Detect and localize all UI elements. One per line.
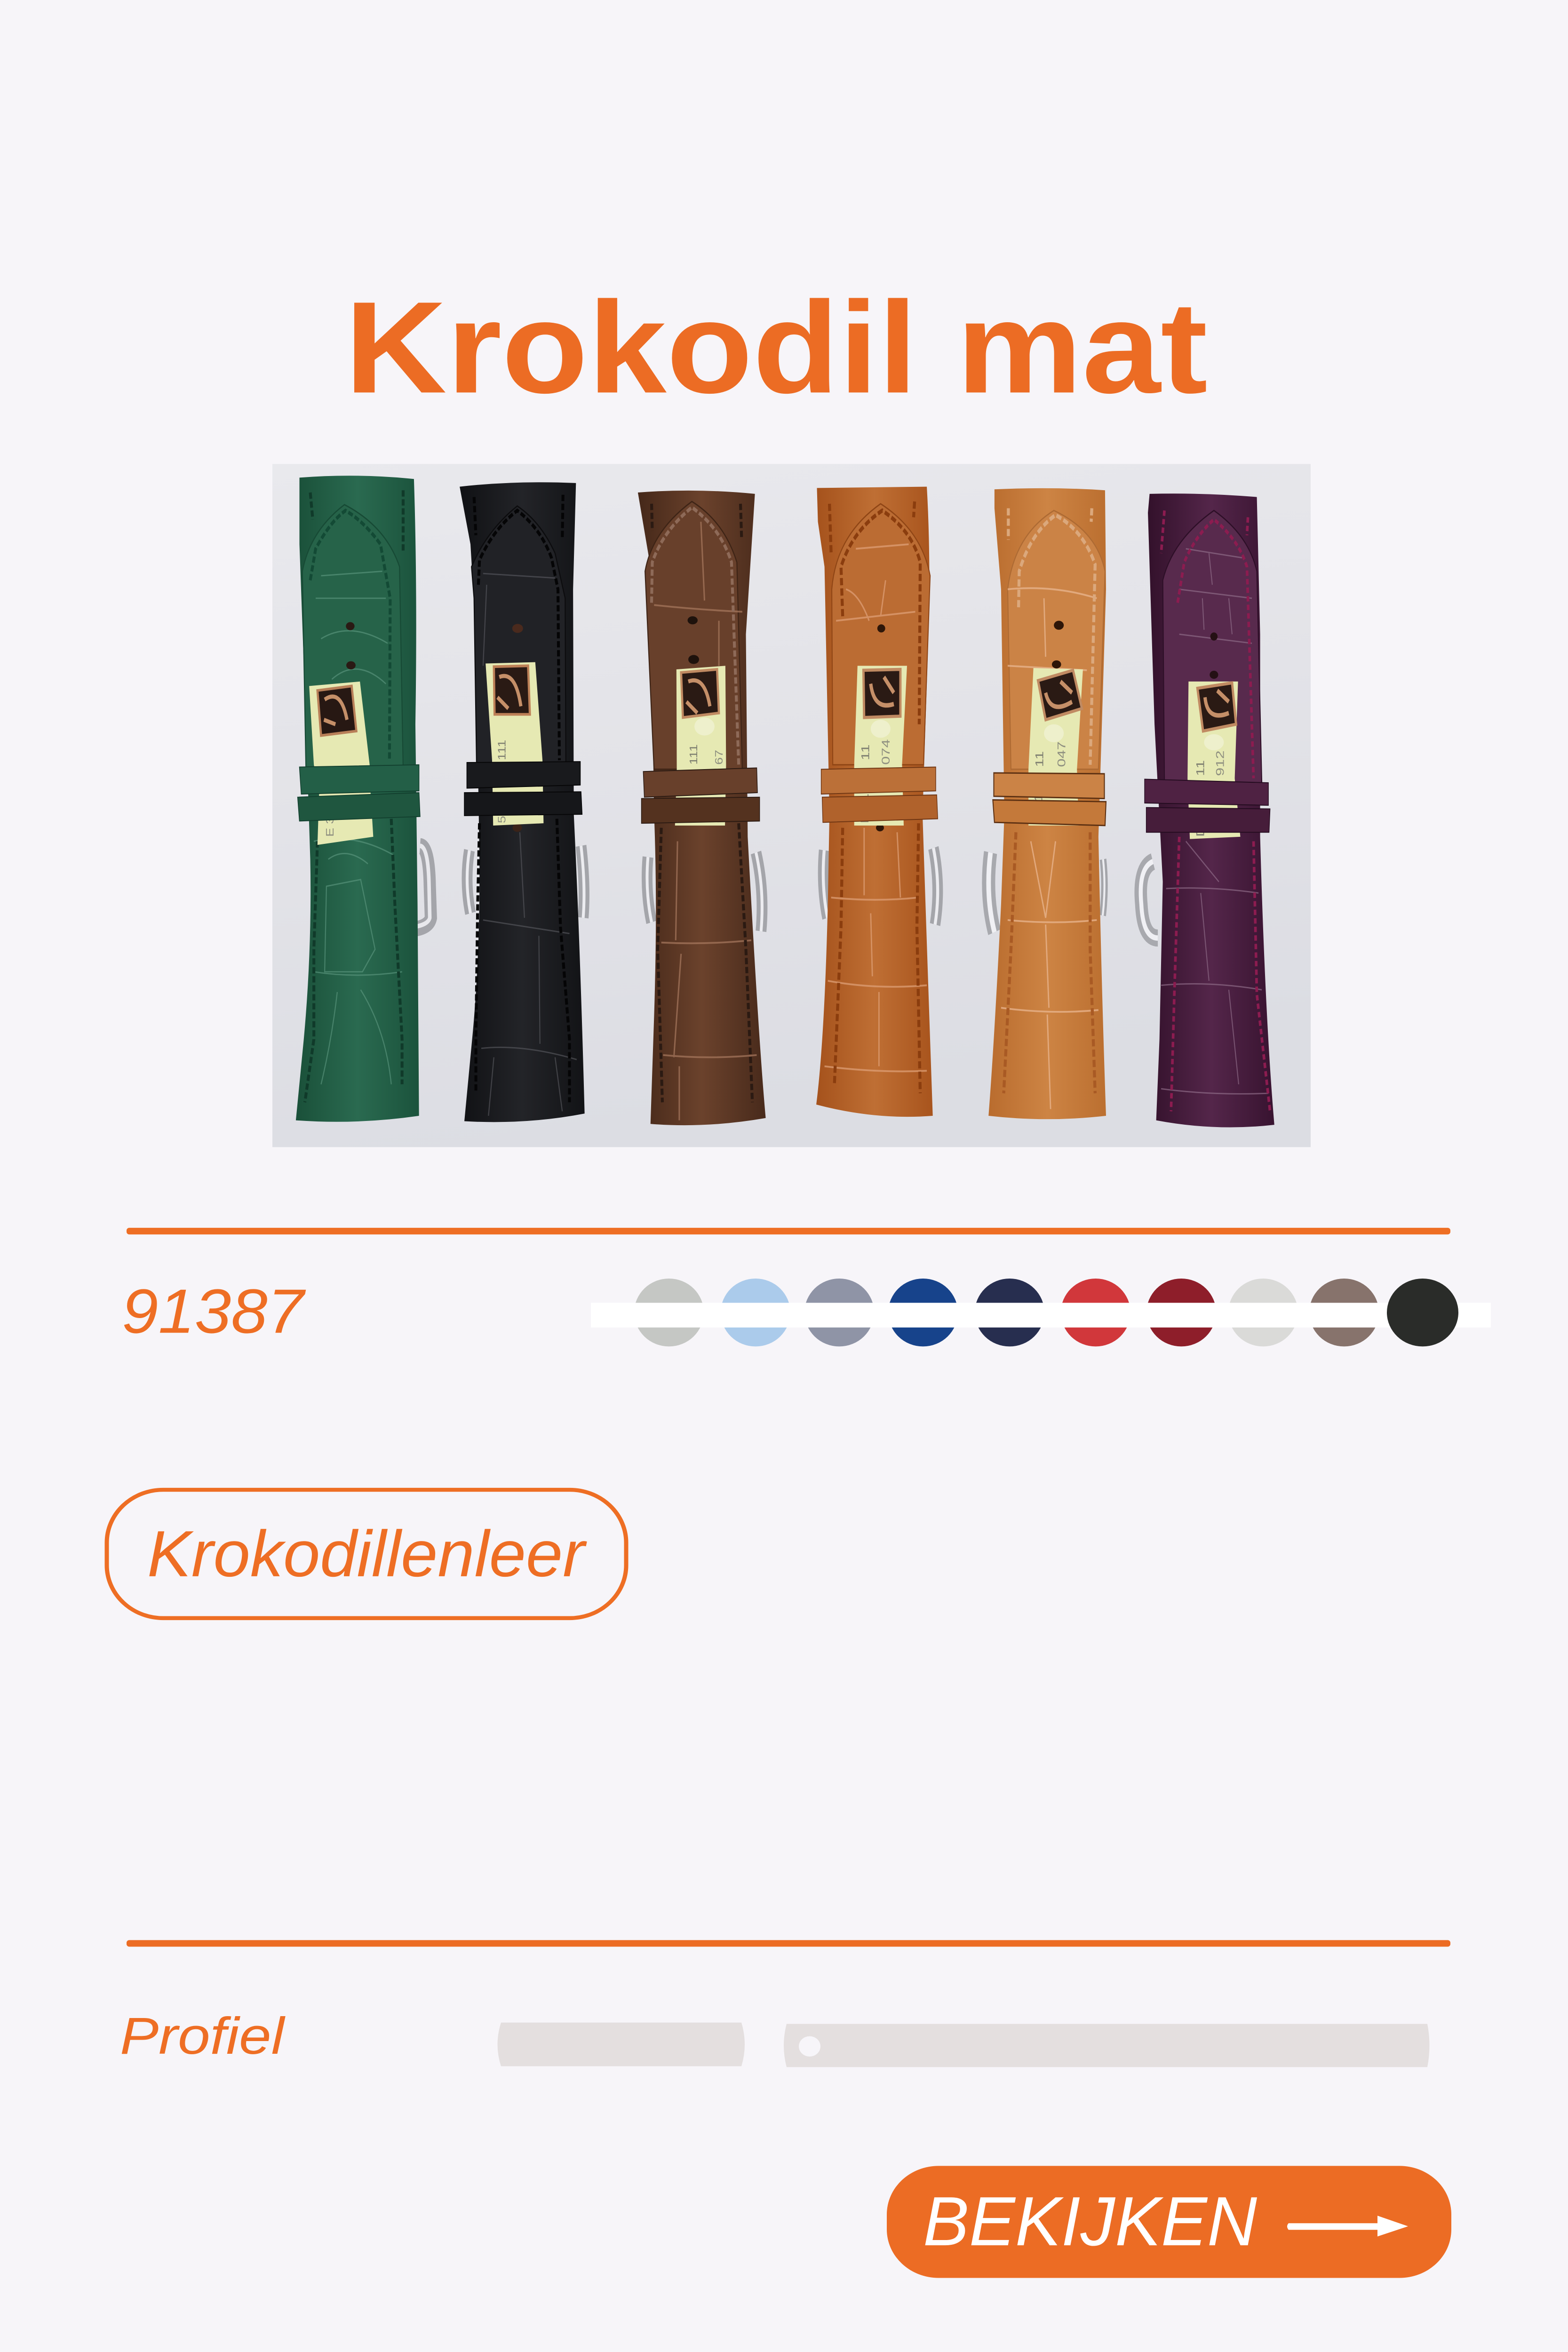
strap: green: 91 — [345, 799, 358, 814]
swatch: taupe — [1309, 1279, 1379, 1346]
swatch: light grey — [634, 1279, 704, 1346]
pill label: Krokodillenleer — [147, 1518, 587, 1590]
strap: cognac — [816, 487, 938, 1117]
divider: top — [127, 1228, 1450, 1234]
profile: strap hole — [799, 2036, 820, 2057]
divider: bottom — [127, 1940, 1450, 1947]
strap: dark brown: 67 — [713, 750, 725, 765]
strap: green: E 3 — [324, 817, 336, 837]
profile: long strap section — [784, 2024, 1429, 2067]
profile: short strap section — [498, 2023, 745, 2066]
profile diagram — [498, 2023, 1429, 2067]
photo background — [272, 464, 1311, 1147]
swatch: royal blue — [888, 1279, 958, 1346]
swatch: slate — [804, 1279, 874, 1346]
button: bekijken — [887, 2166, 1451, 2278]
colour swatches — [591, 1279, 1491, 1346]
strap: cognac: DE1 — [859, 794, 871, 823]
strap: black: 5DE — [495, 797, 508, 823]
button background — [887, 2166, 1451, 2278]
strap: black — [460, 482, 585, 1122]
strap: green — [296, 476, 431, 1122]
swatch: burgundy — [1146, 1279, 1216, 1346]
swatch: pale grey — [1228, 1279, 1298, 1346]
swatch: navy — [975, 1279, 1044, 1346]
strap: purple: 11 — [1194, 760, 1207, 776]
strap: light tan — [988, 488, 1106, 1119]
strap: black: 111 — [495, 740, 508, 760]
strap: purple: 912 — [1214, 750, 1226, 776]
white band across swatches — [591, 1303, 1491, 1327]
icon: arrow — [1287, 2216, 1408, 2236]
swatch: black — [1387, 1279, 1458, 1346]
product photo: six watch straps — [272, 464, 1311, 1147]
pill outline — [107, 1490, 626, 1618]
strap: dark brown: E1 — [688, 807, 700, 823]
article number: 91387 — [122, 1276, 306, 1346]
strap: cognac: 11 — [859, 744, 872, 760]
swatch: sky blue — [721, 1279, 790, 1346]
strap: light tan: 047 — [1056, 741, 1068, 767]
button label: BEKIJKEN — [923, 2183, 1257, 2260]
strap: purple — [1141, 493, 1274, 1128]
profile label: Profiel — [120, 2007, 286, 2065]
strap: purple: DE1 — [1194, 807, 1207, 837]
strap: dark brown: 111 — [687, 744, 700, 765]
title: Krokodil mat — [345, 274, 1208, 420]
material tag — [107, 1490, 626, 1618]
strap: light tan: 11 — [1034, 751, 1046, 767]
strap: dark brown — [638, 491, 766, 1125]
strap: cognac: 074 — [880, 739, 892, 765]
strap: light tan: DE1 — [1033, 794, 1045, 823]
swatch: red — [1061, 1279, 1130, 1346]
